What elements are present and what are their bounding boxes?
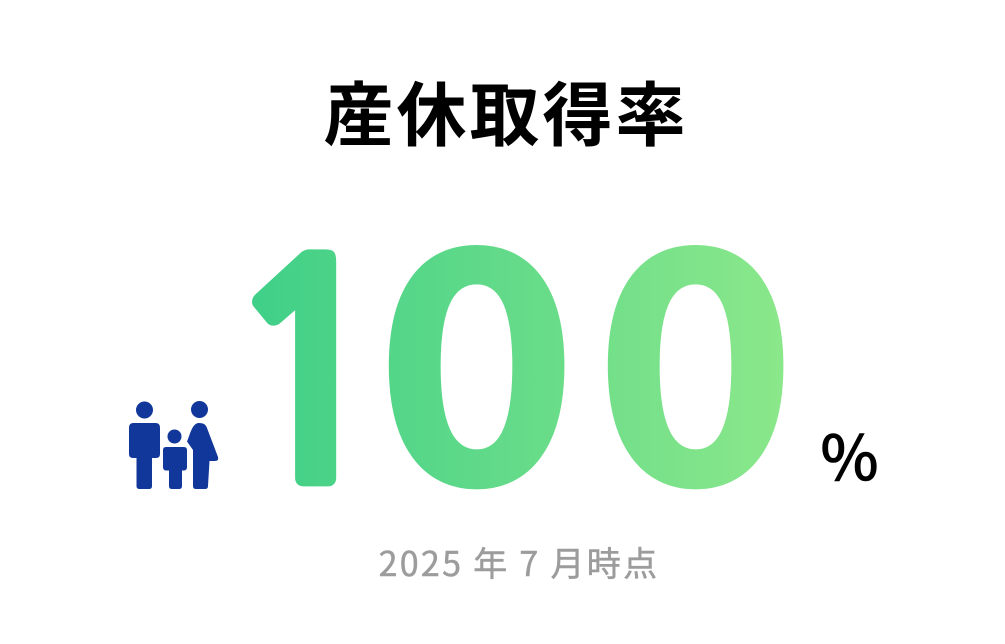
big number: 100: 1 — [218, 229, 400, 526]
date note: 2025 年 7 月時点 — [379, 537, 659, 586]
title: 産休取得率 — [324, 60, 688, 161]
big number: 100 — [218, 121, 796, 574]
icon: father — [129, 402, 160, 489]
icon: family — [129, 401, 218, 489]
percent sign: % — [820, 408, 879, 498]
big number: 100: 0 — [376, 121, 577, 574]
big number: 100: 0 — [595, 121, 796, 574]
icon: child — [163, 430, 187, 489]
icon: mother — [187, 401, 218, 489]
